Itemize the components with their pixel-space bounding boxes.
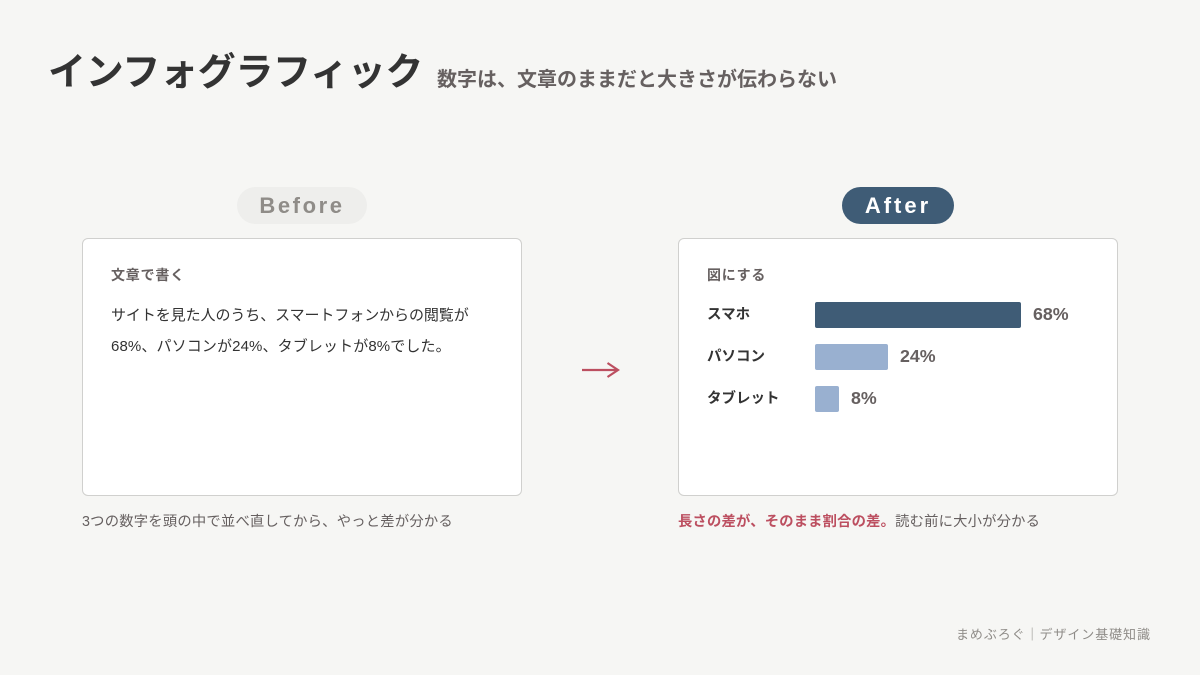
panel: before <box>82 238 522 496</box>
row: タブレット: タブレット <box>707 391 780 407</box>
subtitle: 数字は、文章のままだと大きさが伝わらない <box>437 69 837 91</box>
arrow <box>582 362 620 378</box>
bar chart <box>707 302 1069 412</box>
body text <box>111 307 469 355</box>
panel: after <box>678 238 1118 496</box>
row: スマホ <box>707 302 1069 328</box>
body text: 68%、パソコンが24%、タブレットが8%でした。 <box>111 338 451 355</box>
badge: Before: Before <box>259 193 345 218</box>
badge: After: After <box>865 193 931 218</box>
badge: Before <box>237 187 367 224</box>
row: タブレット <box>707 386 877 412</box>
row: パソコン <box>707 344 936 370</box>
panel label: 図にする: 図にする <box>707 267 766 283</box>
row: パソコン: 24% <box>900 346 936 366</box>
row: スマホ: スマホ <box>707 307 750 323</box>
panel label: 文章で書く: 文章で書く <box>111 267 185 283</box>
footer credit: まめぶろぐ｜デザイン基礎知識 <box>956 627 1151 642</box>
body text: サイトを見た人のうち、スマートフォンからの閲覧が <box>111 307 469 324</box>
row: タブレット: 8% <box>851 388 877 408</box>
badge: After <box>842 187 954 224</box>
title: インフォグラフィック <box>48 52 423 94</box>
caption: after: 長さの差が、そのまま割合の差。読む前に大小が分かる <box>678 514 1040 530</box>
caption: before: 3つの数字を頭の中で並べ直してから、やっと差が分かる <box>82 514 453 530</box>
row: スマホ: 68% <box>1033 304 1069 324</box>
row: パソコン: パソコン <box>707 349 765 365</box>
